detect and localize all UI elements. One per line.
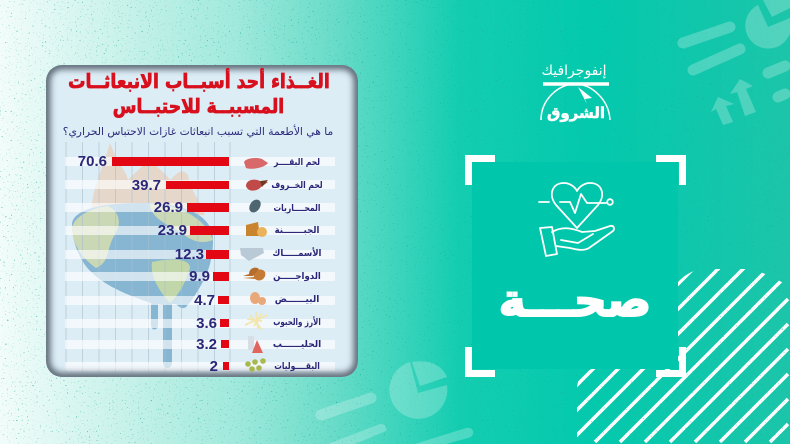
teal square [472,162,678,369]
row: milk: 3.2 [196,336,217,353]
icon: rice and grains [245,312,268,330]
row: rice and grains: 3.6 [196,315,217,332]
row: cheese: الجبـــــــنة [275,226,319,236]
row: eggs [194,292,319,309]
diagonal white hatch pattern [577,269,790,444]
pie chart top right [745,5,790,49]
row: poultry: 9.9 [189,268,210,285]
row: rice and grains: الأرز والحبوب [273,316,321,328]
icon: beef [244,158,268,169]
row: legumes: 2 [210,358,218,375]
arrows top right [730,79,756,116]
icon: milk [248,336,263,353]
cuff [540,227,557,256]
decoration: top right chart shapes [683,0,790,125]
row: cheese [158,222,319,239]
row: legumes [210,358,320,375]
subtitle: ما هي الأطعمة التي تسبب انبعاثات غازات الاحتباس الحراري؟ [63,124,333,138]
icon: chicken leg [243,268,265,280]
row: shellfish: المحــــاريات [274,203,321,214]
row: poultry [189,268,321,285]
icon: fish fillet [240,248,264,261]
panel vignette edge [46,65,358,377]
row: lamb: لحم الخــروف [271,180,323,191]
icon: eggs [250,292,266,305]
bars top right [683,27,730,43]
icon: lamb leg [246,180,268,191]
icon: legumes [245,358,266,372]
row: eggs: البيــــــض [275,294,319,305]
hand [552,226,614,250]
row: milk [196,336,321,353]
panel: category frame [465,155,686,377]
frame corners [465,155,686,377]
logo bottom text: الشروق [547,104,605,122]
icon: heart in hand [539,183,614,256]
row: shellfish [154,199,321,216]
row: fish: 12.3 [175,246,204,263]
title: الغــذاء أحد أسبــاب الانبعاثــات [68,68,330,93]
bars bottom [321,398,371,415]
title [68,68,330,118]
decoration: bottom chart shapes [321,361,473,444]
heart [552,183,602,228]
row: lamb [132,177,323,194]
icon: mussel [247,197,263,215]
row: beef: 70.6 [78,153,107,170]
pie chart bottom [389,362,447,419]
logo top text: إنفوجرافيك [541,63,607,79]
panel: food emissions infographic [46,65,358,377]
row: eggs: 4.7 [194,292,215,309]
row: rice and grains [196,315,321,332]
logo bar and arc [541,84,610,120]
bar chart: emissions by food [78,153,323,375]
row: cheese: 23.9 [158,222,187,239]
row: fish [175,246,321,263]
illustration: melting globe with flames [72,143,213,368]
category title: صحـــة [499,273,651,327]
row: lamb: 39.7 [132,177,161,194]
row stripes [65,157,335,371]
row: beef: لحم البقــــر [273,157,320,168]
row: poultry: الدواجـــــن [273,272,321,282]
title: المسببــة للاحتبــاس [113,96,284,118]
row: legumes: البقــــوليات [274,361,320,372]
row: beef [78,153,320,170]
icon: cheese [246,222,267,237]
grid lines [66,142,230,372]
row: milk: الحليــــــب [273,339,321,350]
pulse line [539,194,606,213]
row: shellfish: 26.9 [154,199,183,216]
row: fish: الأسمـــــاك [273,247,321,259]
logo cursor [578,87,592,104]
logo: Shorouk infographic [541,63,610,122]
